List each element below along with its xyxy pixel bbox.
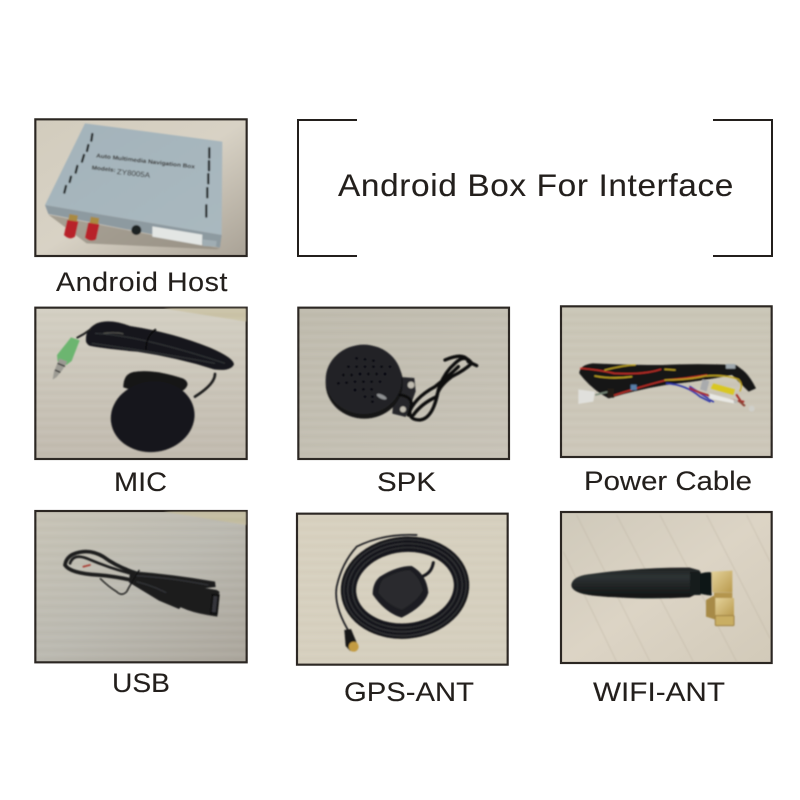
label: MIC: MIC xyxy=(114,467,167,497)
photo: WIFI antenna xyxy=(561,512,772,663)
title bracket frame xyxy=(298,120,772,256)
label: GPS-ANT: GPS-ANT xyxy=(344,677,474,707)
photo: USB cable xyxy=(35,511,247,662)
photo: GPS antenna xyxy=(297,514,508,665)
label: Power Cable: Power Cable xyxy=(584,466,752,496)
title: Android Box For Interface xyxy=(338,167,734,203)
photo: speaker xyxy=(298,308,509,459)
label: USB: USB xyxy=(112,668,170,698)
label: WIFI-ANT: WIFI-ANT xyxy=(593,677,725,707)
photo: Android host box: Models: xyxy=(91,165,116,174)
photo: power cable xyxy=(561,306,772,457)
label: SPK: SPK xyxy=(377,467,436,497)
label: Android Host: Android Host xyxy=(56,267,228,297)
photo: microphone xyxy=(35,308,247,459)
photo: Android host box: Auto Multimedia Navigation Box xyxy=(96,153,196,171)
photo: Android host box: ZY8005A xyxy=(116,167,151,180)
photo: Android host box xyxy=(35,119,247,256)
